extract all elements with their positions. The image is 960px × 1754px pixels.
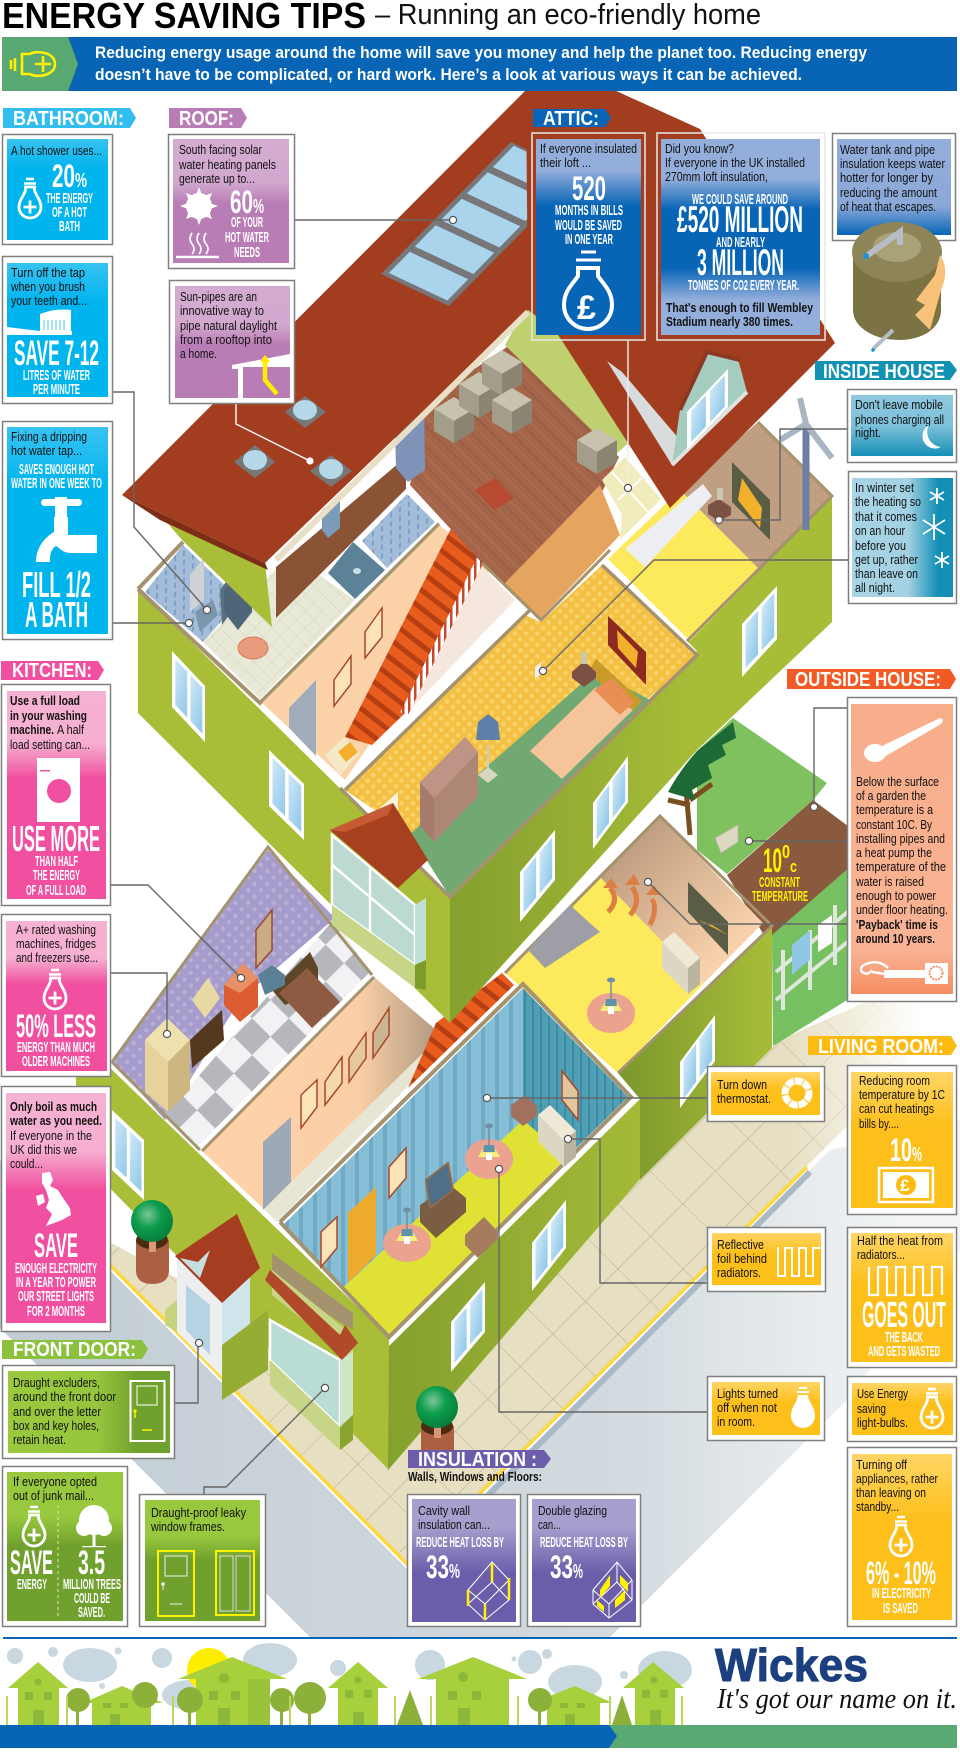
panel: dripping tap: FILL 1/2 xyxy=(22,564,91,605)
panel: lights off: off when not xyxy=(717,1400,777,1415)
panel: washing machine: Use a full load xyxy=(10,693,80,708)
panel: did you know: AND NEARLY xyxy=(716,234,765,251)
panel: water tank: reducing the amount xyxy=(840,185,937,200)
panel: double glazing xyxy=(528,1494,640,1626)
panel: boil water: ENOUGH ELECTRICITY xyxy=(15,1260,97,1277)
label: kitchen: KITCHEN: xyxy=(12,660,92,682)
bay window upper xyxy=(330,803,428,990)
panel: solar water heating: South facing solar xyxy=(179,142,263,157)
panel: thermostat: thermostat. xyxy=(717,1091,771,1106)
panel: double glazing: can... xyxy=(538,1517,561,1532)
panel: heat pump: around 10 years. xyxy=(856,931,935,946)
panel: tap off brushing: when you brush xyxy=(10,279,85,294)
panel: boil water: SAVE xyxy=(34,1227,78,1265)
panel: washing machine: in your washing xyxy=(10,708,87,723)
icon: bank note: £ xyxy=(900,1176,910,1195)
panel: water tank xyxy=(832,134,956,240)
panel: A+ rated appliances: ENERGY THAN MUCH xyxy=(17,1039,95,1056)
icon: thermostat dial xyxy=(785,1081,809,1105)
icon: thermometer xyxy=(864,718,943,762)
panel: heat pump xyxy=(848,698,956,1002)
panel: did you know xyxy=(657,133,825,340)
icon: toothbrush xyxy=(7,310,72,335)
panel: A+ rated appliances: OLDER MACHINES xyxy=(22,1053,90,1070)
panel: energy saving bulbs xyxy=(848,1376,956,1442)
icon: foil zigzag xyxy=(778,1247,820,1276)
panel: junk mail: COULD BE xyxy=(74,1590,110,1607)
panel: standby: appliances, rather xyxy=(856,1471,939,1486)
pavement xyxy=(60,950,960,1572)
title xyxy=(2,0,761,36)
panel: mobile phones: night. xyxy=(855,425,881,440)
panel: draught-proof window frames xyxy=(140,1494,266,1626)
panel: hot shower: THE ENERGY xyxy=(46,190,93,207)
panel: standby: Turning off xyxy=(856,1457,907,1472)
panel: cavity wall: Cavity wall xyxy=(418,1503,470,1518)
panel: room temperature: bills by.... xyxy=(859,1116,899,1131)
label: roof: ROOF: xyxy=(179,108,234,130)
panel: junk mail xyxy=(2,1466,128,1626)
panel: sun pipes: Sun-pipes are an xyxy=(180,289,257,304)
panel: draught excluders: box and key holes, xyxy=(13,1418,99,1433)
icon: glazing xyxy=(593,1562,632,1618)
panel: junk mail: If everyone opted xyxy=(13,1474,97,1489)
panel: washing machine: load setting can... xyxy=(10,737,90,752)
panel: junk mail: out of junk mail... xyxy=(13,1488,94,1503)
panel: boil water: could... xyxy=(10,1156,43,1171)
sun pipes xyxy=(234,396,352,487)
upper block left wall xyxy=(138,589,450,1023)
panel: double glazing: REDUCE HEAT LOSS BY xyxy=(540,1534,628,1551)
bay window lower xyxy=(265,1253,358,1450)
panel: water tank: of heat that escapes. xyxy=(840,199,936,214)
panel: loft insulation saving: their loft ... xyxy=(540,155,591,170)
panel: tap off brushing: Turn off the tap xyxy=(11,265,85,280)
panel: half the heat: radiators... xyxy=(857,1247,905,1262)
intro banner xyxy=(2,37,957,91)
text: walls windows and floors: Walls, Windows and Floors: xyxy=(408,1469,542,1484)
icon: bulb xyxy=(23,1507,45,1546)
panel: did you know: WE COULD SAVE AROUND xyxy=(692,191,788,208)
panel: sun pipes: from a rooftop into xyxy=(180,332,272,347)
intro banner: doesn’t have to be complicated, or hard work. Here’s a look at various ways it can be achieved. xyxy=(95,66,802,84)
panel: boil water: OUR STREET LIGHTS xyxy=(18,1288,94,1305)
panel: energy saving bulbs: saving xyxy=(857,1401,886,1416)
panel: room temperature: % xyxy=(912,1144,922,1166)
icon: bulb xyxy=(44,970,66,1009)
10 degrees label: 10 xyxy=(763,842,782,880)
panel: dripping tap: A BATH xyxy=(25,594,88,635)
panel: hot shower: A hot shower uses... xyxy=(11,143,102,158)
panel: lights off xyxy=(708,1376,824,1440)
panel: room temperature: can cut heatings xyxy=(859,1101,934,1116)
panel: boil water: water as you need. xyxy=(9,1113,102,1128)
panel: draught-proof window frames: window frames. xyxy=(150,1519,225,1534)
panel: winter heating: the heating so xyxy=(855,494,921,509)
icon: heat waves xyxy=(176,233,219,257)
icon: foil zigzag xyxy=(869,1267,942,1295)
logo: Wickes xyxy=(715,1639,957,1715)
panel: loft insulation saving: £ xyxy=(577,289,596,327)
panel: hot shower xyxy=(2,134,112,244)
panel: washing machine: OF A FULL LOAD xyxy=(26,882,86,899)
panel: A+ rated appliances xyxy=(2,914,110,1076)
panel: washing machine: machine. xyxy=(10,722,54,737)
panel: reflective foil: foil behind xyxy=(717,1251,767,1266)
panel: heat pump: temperature of the xyxy=(856,859,946,874)
panel: lights off: Lights turned xyxy=(717,1386,778,1401)
panel: solar water heating: 60 xyxy=(230,184,253,220)
panel: reflective foil: radiators. xyxy=(717,1265,761,1280)
icon: door and window xyxy=(158,1551,254,1616)
green gable under roof xyxy=(163,518,272,627)
panel: solar water heating: % xyxy=(253,196,264,218)
lower block right wall xyxy=(388,1099,640,1470)
upper corridor xyxy=(262,525,515,780)
panel: standby: standby... xyxy=(856,1499,899,1514)
panel: cavity wall: insulation can... xyxy=(418,1517,490,1532)
icon: snowflakes xyxy=(923,488,949,568)
icon: moon xyxy=(922,425,941,449)
label: insulation: INSULATION : xyxy=(418,1449,537,1471)
panel: did you know: That's enough to fill Wembley xyxy=(666,300,814,315)
panel: dripping tap xyxy=(2,422,112,640)
panel: heat pump: 'Payback' time is xyxy=(856,917,938,932)
panel: loft insulation saving xyxy=(532,133,645,340)
panel: thermostat: Turn down xyxy=(717,1077,767,1092)
panel: reflective foil: Reflective xyxy=(717,1237,764,1252)
icon: bank note xyxy=(879,1168,933,1202)
panel: boil water: If everyone in the xyxy=(10,1128,92,1143)
panel: solar water heating: water heating panels xyxy=(178,157,276,172)
panel: junk mail: SAVE xyxy=(10,1544,53,1582)
panel: room temperature xyxy=(848,1066,956,1214)
panel: washing machine: A half xyxy=(57,722,84,737)
panel: tap off brushing: LITRES OF WATER xyxy=(23,367,90,384)
panel: reflective foil xyxy=(708,1228,826,1292)
icon: water tank xyxy=(852,222,945,352)
intro banner: Reducing energy usage around the home will save you money and help the planet too. Reducing energy xyxy=(95,44,868,62)
panel: boil water: Only boil as much xyxy=(10,1099,97,1114)
panel: solar water heating: OF YOUR xyxy=(231,214,263,231)
panel: loft insulation saving: WOULD BE SAVED xyxy=(555,217,622,234)
panel: junk mail: 3.5 xyxy=(78,1544,105,1582)
icon: pound bulb xyxy=(564,252,612,329)
panel: double glazing: % xyxy=(573,1561,583,1583)
icon: tree xyxy=(76,1505,112,1547)
garden with tree and heat pump xyxy=(668,718,860,1046)
potted tree left xyxy=(131,1200,173,1284)
panel: hot shower: OF A HOT xyxy=(52,204,87,221)
panel: junk mail: SAVED. xyxy=(78,1604,105,1621)
panel: A+ rated appliances: 50% LESS xyxy=(16,1008,96,1044)
icon: sun xyxy=(180,187,218,225)
panel: energy saving bulbs: light-bulbs. xyxy=(857,1415,908,1430)
panel: junk mail: MILLION TREES xyxy=(63,1576,121,1593)
panel: cavity wall: % xyxy=(449,1561,460,1583)
panel: draught excluders: and over the letter xyxy=(13,1404,102,1419)
panel: did you know: If everyone in the UK installed xyxy=(665,155,805,170)
icon: washing machine xyxy=(37,758,80,822)
panel: cavity wall: REDUCE HEAT LOSS BY xyxy=(416,1534,504,1551)
front porch xyxy=(165,1214,268,1400)
panel: water tank: Water tank and pipe xyxy=(840,142,935,157)
panel: did you know: 270mm loft insulation, xyxy=(665,169,768,184)
label: living room: LIVING ROOM: xyxy=(818,1036,944,1058)
text: TEMPERATURE xyxy=(752,888,808,905)
icon: bulb xyxy=(921,1389,943,1428)
ground floor right room xyxy=(505,816,772,1180)
panel: heat pump: of a garden the xyxy=(856,788,926,803)
panel: half the heat xyxy=(848,1228,956,1368)
panel: winter heating xyxy=(848,472,956,604)
panel: junk mail: ENERGY xyxy=(17,1576,47,1593)
panel: washing machine: THAN HALF xyxy=(35,853,78,870)
label: attic: ATTIC: xyxy=(543,108,599,130)
panel: did you know: 3 MILLION xyxy=(697,242,784,283)
bedroom xyxy=(340,565,697,897)
panel: heat pump: temperature is a xyxy=(856,802,934,817)
icon: bulb xyxy=(19,179,41,218)
panel: A+ rated appliances: machines, fridges xyxy=(16,936,96,951)
10 degrees label xyxy=(752,842,808,905)
panel: hot shower: % xyxy=(75,170,87,192)
icon: pipe and heat pump xyxy=(861,962,948,984)
panel: winter heating: than leave on xyxy=(855,566,918,581)
bathroom xyxy=(138,494,440,703)
solar panels xyxy=(381,142,579,306)
panel: heat pump: water is raised xyxy=(855,874,924,889)
icon: bulb xyxy=(890,1517,912,1556)
upper block right wall xyxy=(450,651,697,1023)
panel: did you know: £520 MILLION xyxy=(677,199,803,240)
panel: double glazing: 33 xyxy=(550,1549,573,1585)
potted tree right xyxy=(416,1386,458,1466)
panel: winter heating: that it comes xyxy=(855,509,917,524)
panel: standby xyxy=(848,1448,956,1626)
panel: loft insulation saving: MONTHS IN BILLS xyxy=(555,202,623,219)
panel: cavity wall: 33 xyxy=(426,1549,449,1585)
panel: tap off brushing: SAVE 7-12 xyxy=(14,334,99,373)
panel: dripping tap: WATER IN ONE WEEK TO xyxy=(11,475,102,492)
panel: cavity wall xyxy=(408,1494,520,1626)
panel: tap off brushing: your teeth and... xyxy=(11,293,87,308)
panel: boil water: FOR 2 MONTHS xyxy=(27,1303,85,1320)
panel: washing machine: THE ENERGY xyxy=(33,867,80,884)
panel: heat pump: a heat pump the xyxy=(856,845,932,860)
callout lines and dots xyxy=(111,216,848,1494)
panel: washing machine: USE MORE xyxy=(12,818,100,859)
panel: winter heating: before you xyxy=(855,538,906,553)
windows xyxy=(112,586,777,1372)
panel: tap off brushing: PER MINUTE xyxy=(33,381,80,398)
panel: solar water heating: HOT WATER xyxy=(225,229,269,246)
panel: half the heat: Half the heat from xyxy=(857,1233,943,1248)
panel: winter heating: get up, rather xyxy=(855,552,919,567)
road xyxy=(0,1120,960,1637)
main staircase xyxy=(345,468,505,745)
panel: hot shower: 20 xyxy=(52,158,75,194)
panel: draught excluders: retain heat. xyxy=(13,1432,66,1447)
panel: winter heating: In winter set xyxy=(855,480,914,495)
panel: thermostat xyxy=(708,1066,824,1122)
label: front door: FRONT DOOR: xyxy=(13,1339,136,1361)
icon: solid bulb xyxy=(791,1387,815,1428)
panel: double glazing: Double glazing xyxy=(538,1503,607,1518)
lower block left wall xyxy=(76,1035,389,1470)
panel: A+ rated appliances: and freezers use... xyxy=(16,950,98,965)
panel: heat pump: constant 10C. By xyxy=(856,817,932,832)
icon: tap xyxy=(36,497,97,562)
panel: room temperature: 10 xyxy=(890,1132,912,1168)
panel: heat pump: enough to power xyxy=(856,888,937,903)
icon: UK map xyxy=(36,1172,71,1226)
panel: loft insulation saving: 520 xyxy=(572,170,606,208)
icon: light bulb xyxy=(11,52,55,76)
panel: sun pipes xyxy=(170,280,294,404)
icon: sun pipe diagram xyxy=(232,354,290,398)
panel: solar water heating: generate up to... xyxy=(179,171,255,186)
panel: draught-proof window frames: Draught-proof leaky xyxy=(151,1505,246,1520)
panel: sun pipes: pipe natural daylight xyxy=(180,318,277,333)
panel: tap off brushing xyxy=(2,256,112,404)
footer illustration: houses and trees xyxy=(6,1657,684,1725)
living room xyxy=(280,984,631,1337)
logo: Wickes: Wickes xyxy=(715,1639,868,1691)
panel: mobile phones xyxy=(848,390,956,462)
panel: loft insulation saving: If everyone insulated xyxy=(540,141,637,156)
panel: mobile phones: Don't leave mobile xyxy=(855,397,943,412)
corridor ground floor xyxy=(202,973,514,1222)
panel: loft insulation saving: IN ONE YEAR xyxy=(565,231,613,248)
panel: dripping tap: hot water tap... xyxy=(11,443,82,458)
panel: sun pipes: a home. xyxy=(180,346,217,361)
panel: draught excluders: around the front door xyxy=(13,1389,117,1404)
kitchen xyxy=(112,847,372,1150)
panel: water tank: hotter for longer by xyxy=(840,170,933,185)
panel: heat pump: Below the surface xyxy=(856,774,939,789)
label: bathroom: BATHROOM: xyxy=(13,108,124,130)
10 degrees label: CONSTANT xyxy=(759,874,800,891)
panel: solar water heating xyxy=(168,134,294,268)
panel: sun pipes: innovative way to xyxy=(180,303,264,318)
panel: did you know: Did you know? xyxy=(665,141,734,156)
icon: cavity wall xyxy=(468,1562,509,1620)
footer illustration: sun xyxy=(187,1648,231,1692)
panel: standby: IS SAVED xyxy=(883,1600,918,1617)
panel: room temperature: Reducing room xyxy=(859,1073,930,1088)
panel: dripping tap: Fixing a dripping xyxy=(11,429,87,444)
panel: draught excluders: Draught excluders, xyxy=(13,1375,100,1390)
panel: solar water heating: NEEDS xyxy=(234,244,260,261)
top right room xyxy=(608,398,832,750)
attic roof with dormer xyxy=(526,90,835,508)
panel: hot shower: BATH xyxy=(59,218,80,235)
panel: A+ rated appliances: A+ rated washing xyxy=(16,922,96,937)
10 degrees label: c xyxy=(790,857,797,876)
panel: boil water: IN A YEAR TO POWER xyxy=(16,1274,96,1291)
panel: dripping tap: SAVES ENOUGH HOT xyxy=(19,461,94,478)
panel: standby: than leaving on xyxy=(856,1485,926,1500)
10 degrees label: 0 xyxy=(782,842,790,862)
panel: did you know: TONNES OF CO2 EVERY YEAR. xyxy=(688,277,799,294)
panel: energy saving bulbs: Use Energy xyxy=(857,1386,908,1401)
attic interior xyxy=(276,300,661,620)
panel: did you know: Stadium nearly 380 times. xyxy=(666,314,793,329)
footer rule xyxy=(3,1637,957,1639)
icon: front door xyxy=(130,1381,164,1441)
panel: winter heating: all night. xyxy=(855,580,895,595)
panel: draught excluders xyxy=(2,1366,174,1458)
panel: winter heating: on an hour xyxy=(855,523,906,538)
panel: lights off: in room. xyxy=(717,1414,755,1429)
footer band xyxy=(0,1725,957,1748)
panel: washing machine xyxy=(2,684,110,906)
main roof xyxy=(122,90,614,570)
footer illustration: clouds xyxy=(7,1643,692,1710)
panel: boil water xyxy=(2,1086,110,1332)
panel: boil water: UK did this we xyxy=(10,1142,77,1157)
